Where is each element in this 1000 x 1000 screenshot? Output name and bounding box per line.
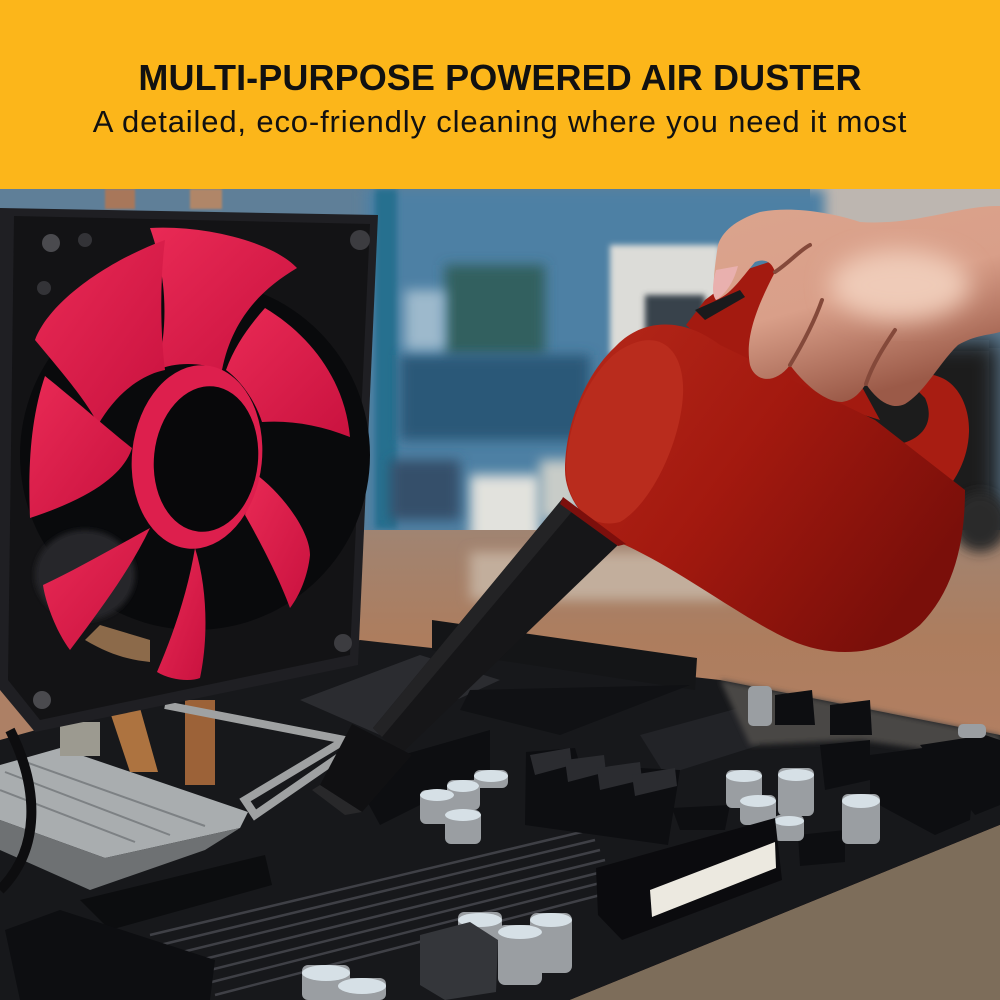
air duster xyxy=(312,255,969,815)
power switch xyxy=(695,290,745,320)
jug body xyxy=(565,325,965,652)
24-pin connector xyxy=(596,818,782,940)
fan blades xyxy=(29,228,350,680)
jug handle right xyxy=(895,374,969,492)
nozzle xyxy=(312,498,618,815)
memory slots xyxy=(150,830,612,995)
motherboard xyxy=(0,620,1000,1000)
banner xyxy=(0,0,1000,189)
finger creases xyxy=(775,245,895,384)
heatsink xyxy=(0,700,352,890)
hand xyxy=(713,206,1000,406)
fan hub xyxy=(123,359,271,555)
capacitors xyxy=(302,686,986,1000)
title: MULTI-PURPOSE POWERED AIR DUSTER xyxy=(138,57,862,98)
jug handle left xyxy=(686,255,880,420)
fan xyxy=(0,208,378,732)
socket connectors and chips xyxy=(5,690,1000,1000)
subtitle: A detailed, eco-friendly cleaning where you need it most xyxy=(93,104,907,139)
